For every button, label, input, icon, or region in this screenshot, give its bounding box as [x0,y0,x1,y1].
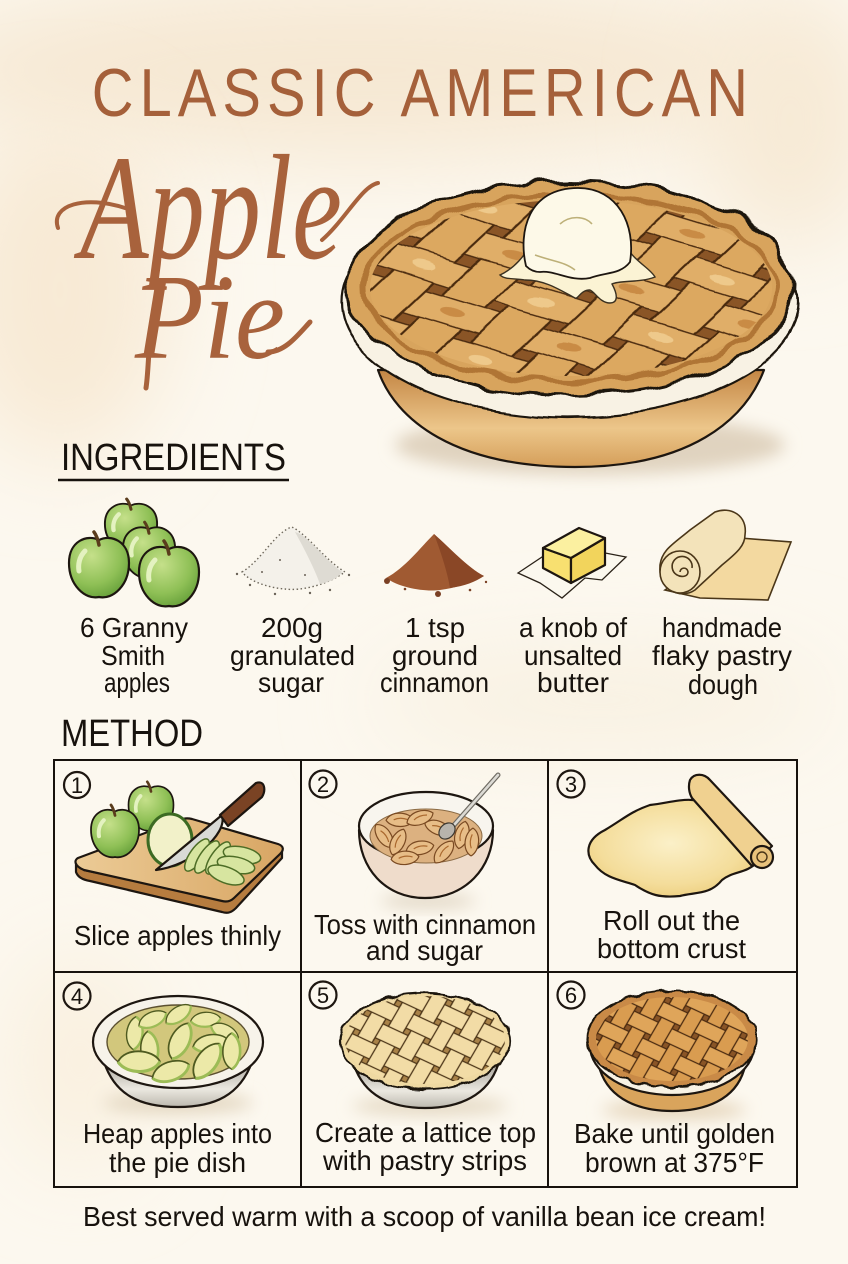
ingredient: butter: a knob of [519,612,627,643]
crust edge [346,181,794,395]
title: Apple Pie script [57,125,378,388]
step 5: lattice top: Create a lattice top [315,1117,536,1148]
step 2: toss with cinnamon and sugar: Toss with cinnamon [314,909,536,940]
step 3: roll out crust: Roll out the [603,905,740,936]
icon: sugar pile [236,527,350,595]
step 2: toss with cinnamon and sugar [310,770,536,966]
method grid [54,760,797,1187]
title: Classic American: CLASSIC AMERICAN [92,56,748,131]
step 1: slice apples: 1 [71,773,83,798]
icon: rolled dough [588,775,773,897]
step 3: roll out crust: bottom crust [597,933,746,964]
step 5: lattice top [310,982,536,1176]
ingredient: butter [518,528,627,698]
title: Apple Pie script: Apple [73,125,342,291]
lattice [370,201,771,376]
icon: apples on cutting board [76,782,283,913]
ingredient: cinnamon: 1 tsp [405,612,465,643]
ingredient: sugar: 200g [261,612,323,643]
ingredient: pastry dough: flaky pastry [652,640,792,671]
pie dish [378,370,764,467]
step 6: bake until golden: Bake until golden [574,1118,775,1149]
ingredient: apples: Smith [101,640,165,671]
glass rim [342,187,798,417]
icon: cinnamon pile [384,534,487,597]
icon: butter on paper [518,528,626,598]
ingredient: sugar: granulated [230,640,355,671]
icon: unbaked lattice pie [340,990,510,1115]
step 4: heap apples [64,982,272,1178]
ingredient: sugar: sugar [258,667,324,698]
step 3: roll out crust [558,770,773,964]
heading: ingredients: INGREDIENTS [61,437,286,479]
ice cream scoop [500,188,655,303]
icon: baked pie [587,990,757,1119]
ingredient: cinnamon [380,534,489,698]
step 3: roll out crust: 3 [565,772,577,797]
icon: mixing bowl [359,775,498,908]
ingredient: pastry dough: handmade [662,612,782,643]
step 4: heap apples: 4 [71,984,83,1009]
ingredient: apples [69,499,199,698]
ingredient: cinnamon: ground [392,640,478,671]
ingredient: pastry dough [652,510,792,700]
step 6: bake until golden: brown at 375°F [585,1147,764,1178]
step 4: heap apples: Heap apples into [83,1118,272,1149]
ingredient: sugar [230,527,355,698]
step 6: bake until golden [558,982,775,1178]
step 4: heap apples: the pie dish [109,1147,246,1178]
icon: rolled pastry [660,510,791,600]
step 1: slice apples: Slice apples thinly [74,920,281,951]
ingredient: pastry dough: dough [688,669,758,700]
closing tip: Best served warm with a scoop of vanilla bean ice cream! [83,1201,766,1232]
icon: green apples [69,499,199,606]
step 1: slice apples [64,772,283,951]
hero apple pie with ice cream [342,181,798,475]
step 5: lattice top: 5 [317,983,329,1008]
ingredient: apples: apples [104,667,170,698]
step 2: toss with cinnamon and sugar: 2 [317,772,329,797]
title: Apple Pie script: Pie [134,250,285,385]
icon: dish of apples [93,996,263,1114]
step 5: lattice top: with pastry strips [322,1145,527,1176]
ingredient: cinnamon: cinnamon [380,667,489,698]
step 6: bake until golden: 6 [565,983,577,1008]
ingredient: apples: 6 Granny [80,612,188,643]
heading: method: METHOD [61,713,203,755]
ingredient: butter: butter [537,667,609,698]
ingredient: butter: unsalted [524,640,622,671]
step 2: toss with cinnamon and sugar: and sugar [366,935,483,966]
